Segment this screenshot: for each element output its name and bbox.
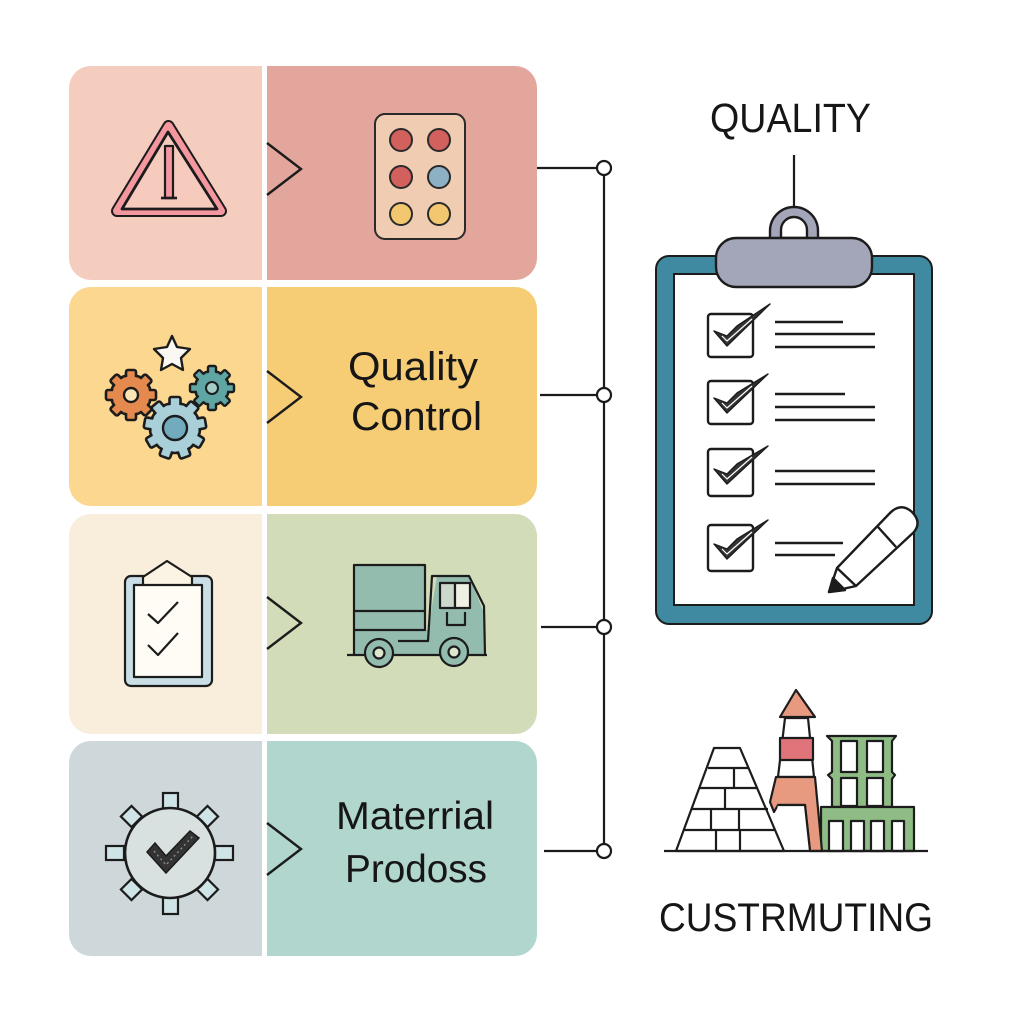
heading: CUSTRMUTING: CUSTRMUTING	[659, 896, 933, 940]
panel: row 4 gear check and Materrial Prodoss	[69, 741, 537, 956]
lighthouse tower	[770, 690, 822, 851]
panel: row 1 warning to pill pack	[69, 66, 537, 280]
icon: large clipboard	[656, 207, 932, 624]
infographic canvas	[69, 66, 933, 956]
brick pyramid	[676, 748, 784, 851]
arrow: row 2 chevron	[267, 371, 301, 423]
icon: teal gear	[190, 366, 234, 410]
panel: row 2 gears and Quality Control	[69, 287, 537, 506]
icon: warning triangle	[117, 126, 221, 211]
arrow: row 4 chevron	[267, 823, 301, 875]
connector: bracket linking rows	[537, 161, 611, 858]
icon: blue gear	[144, 397, 206, 459]
panel: row 2 gears and Quality Control: Control	[351, 395, 482, 439]
checklist rows	[708, 304, 875, 571]
icon: orange gear	[106, 370, 156, 420]
heading: QUALITY: QUALITY	[710, 95, 871, 141]
arrow: row 1 chevron	[267, 143, 301, 195]
arrow: row 3 chevron	[267, 597, 301, 649]
green building	[821, 736, 914, 851]
label: Materrial Prodoss: Materrial	[336, 795, 494, 838]
clip	[716, 207, 872, 287]
panel: row 4 gear check and Materrial Prodoss: Prodoss	[345, 848, 487, 891]
panel: row 3 checklist to truck	[69, 514, 537, 734]
connector: heading to clipboard	[793, 155, 795, 207]
icon: truck	[347, 565, 487, 667]
icon: small clipboard	[125, 561, 212, 686]
icon: pill pack	[375, 114, 465, 239]
icon: gear with check	[106, 793, 233, 914]
icon: star	[154, 336, 190, 370]
label: Quality Control: Quality	[348, 345, 478, 389]
icon: buildings	[664, 690, 928, 851]
pencil	[829, 507, 918, 592]
